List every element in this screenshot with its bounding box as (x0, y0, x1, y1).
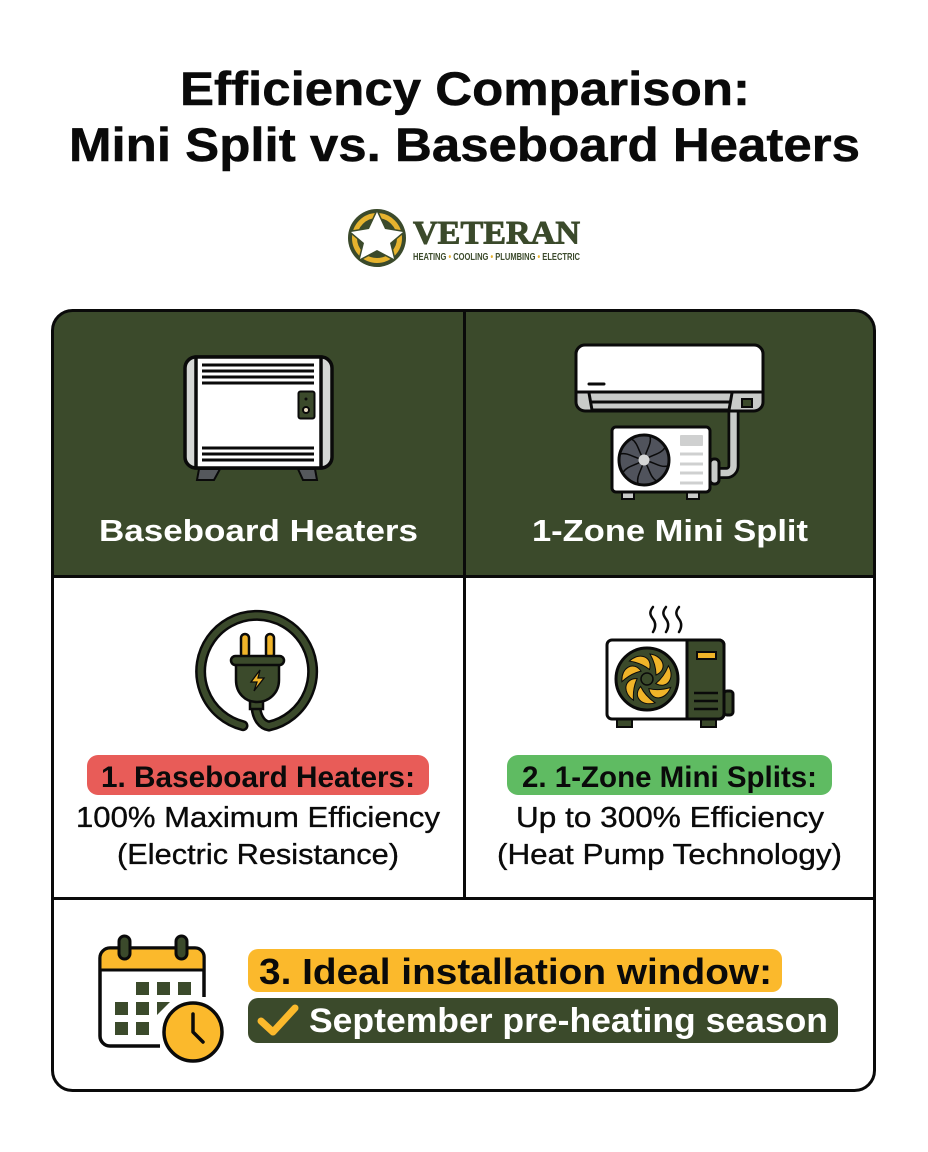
icon: check mark (261, 1008, 295, 1032)
text: mini split efficiency: (Heat Pump Technology) (497, 839, 842, 871)
label pill: baseboard heaters: 1. Baseboard Heaters: (101, 761, 415, 794)
logo: Veteran (348, 209, 580, 267)
icon: baseboard heater (185, 357, 332, 480)
text: baseboard efficiency: (Electric Resistance) (117, 839, 399, 871)
icon: calendar with clock (100, 936, 227, 1066)
logo: Veteran: VETERAN (413, 216, 580, 252)
icon: indoor and outdoor mini split units (576, 345, 763, 499)
comparison card (52, 310, 875, 1090)
text: mini split efficiency (497, 802, 842, 871)
label pill: mini splits: 2. 1-Zone Mini Splits: (522, 761, 817, 794)
label pill: september season: September pre-heating season (309, 1002, 828, 1040)
logo: Veteran: HEATING • COOLING • PLUMBING • ELECTRIC (413, 252, 580, 263)
title: Mini Split vs. Baseboard Heaters (69, 118, 860, 171)
icon: electric plug (201, 615, 313, 726)
title: Efficiency Comparison: (180, 62, 750, 115)
label pill: installation window: 3. Ideal installation window: (259, 951, 772, 992)
text: baseboard efficiency: 100% Maximum Efficiency (76, 802, 441, 834)
icon: outdoor heat pump (607, 607, 733, 727)
text: mini split efficiency: Up to 300% Efficiency (516, 802, 825, 834)
text: baseboard efficiency (76, 802, 441, 871)
title (69, 62, 860, 171)
heading: 1-zone mini split: 1-Zone Mini Split (532, 513, 808, 548)
heading: baseboard heaters: Baseboard Heaters (99, 513, 418, 548)
